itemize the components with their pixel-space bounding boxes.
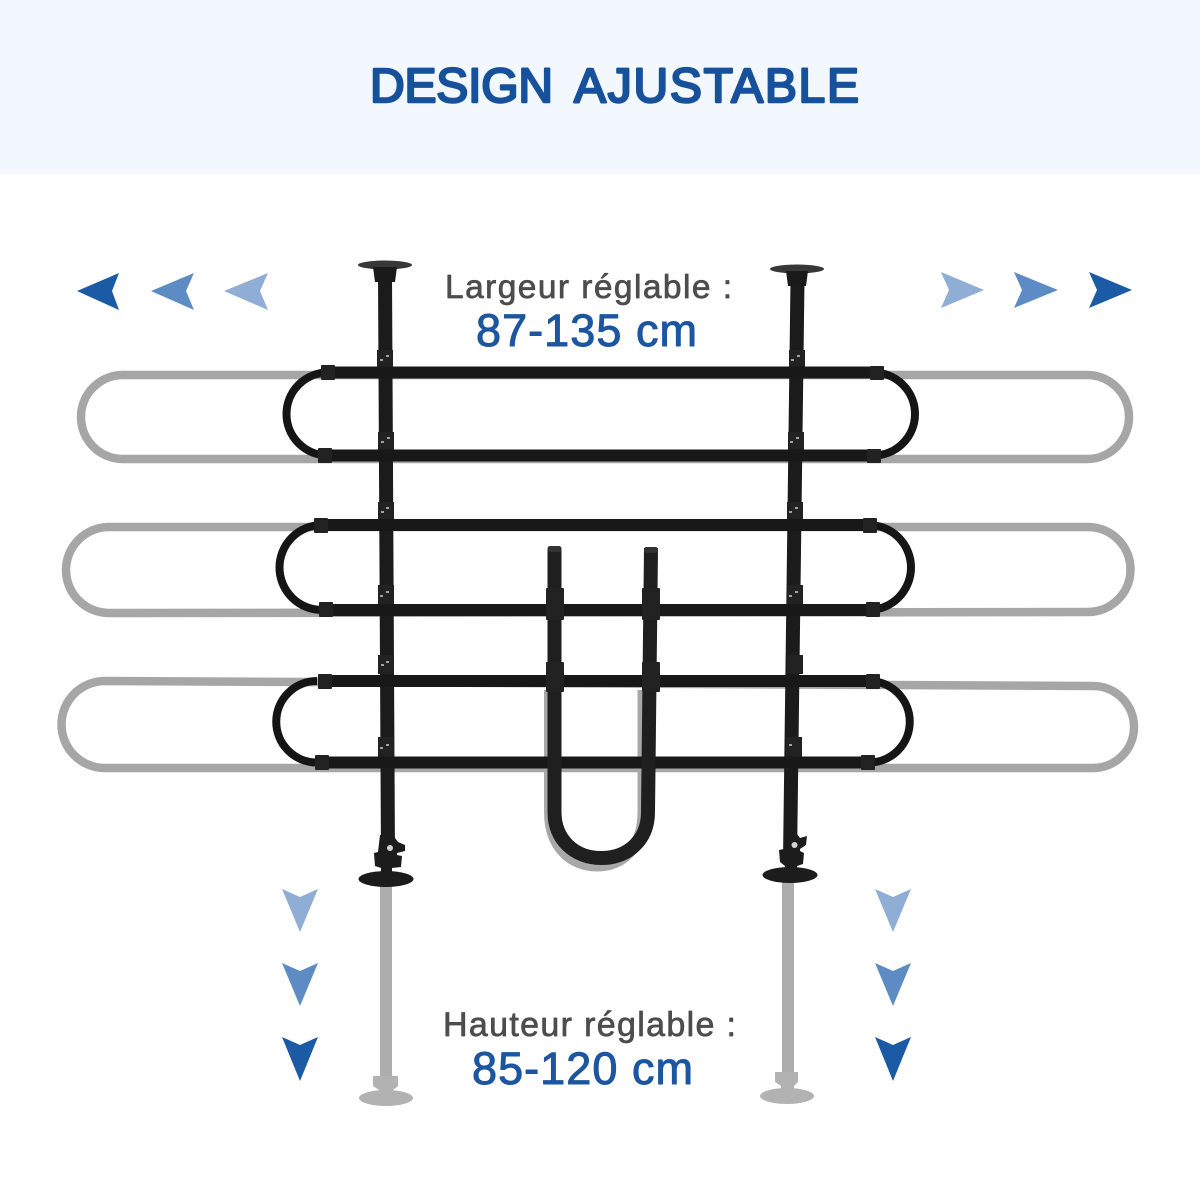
knob screw right xyxy=(792,842,798,848)
grey lower pole: left xyxy=(380,885,392,1092)
clamp highlights left xyxy=(380,356,390,748)
grey shadow of U piece xyxy=(550,690,643,866)
width label: Largeur réglable : xyxy=(445,269,732,306)
left black pole xyxy=(358,260,414,887)
clamp highlights right xyxy=(789,356,800,745)
arrows: height left xyxy=(282,889,318,1081)
width value: 87-135 cm xyxy=(476,305,697,356)
title: AJUSTABLE xyxy=(574,60,859,113)
header band xyxy=(0,0,1200,174)
title: DESIGN xyxy=(370,60,553,113)
arrows: width decreasing left xyxy=(77,273,268,310)
foot left xyxy=(358,871,414,887)
grey foot left xyxy=(359,1076,413,1106)
knob left xyxy=(374,834,405,874)
right black pole xyxy=(762,264,824,883)
knob right xyxy=(779,834,807,872)
grey extended position of the barrier xyxy=(62,375,1134,1092)
arrows: width increasing right xyxy=(941,272,1132,308)
title xyxy=(370,60,859,113)
black barrier loop: bottom xyxy=(276,674,910,770)
arrows: height right xyxy=(875,889,911,1081)
foot right xyxy=(762,867,818,883)
height value: 85-120 cm xyxy=(472,1043,693,1094)
knob screw left xyxy=(387,845,393,851)
height label: Hauteur réglable : xyxy=(443,1006,736,1044)
grey foot right xyxy=(760,1072,814,1104)
grey lower pole: right xyxy=(782,880,794,1090)
black barrier loop: middle xyxy=(280,518,911,617)
black barrier loop: top xyxy=(286,365,915,463)
U-shaped centre piece xyxy=(546,546,660,858)
